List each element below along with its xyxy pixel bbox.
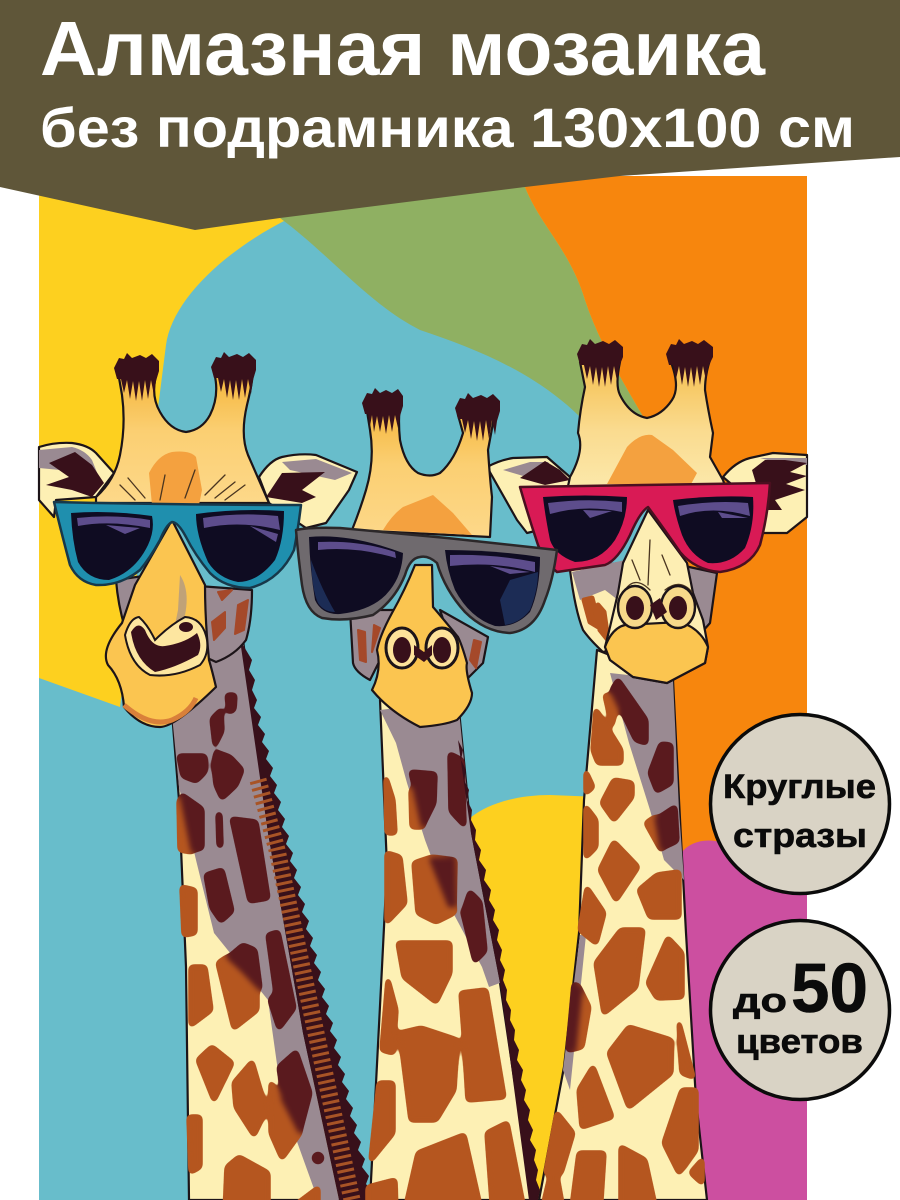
shape: green background xyxy=(280,187,645,422)
middle face xyxy=(372,565,472,727)
left nose xyxy=(125,617,207,676)
right muzzle xyxy=(605,622,708,683)
left ear, viewer left xyxy=(39,443,114,517)
left neck xyxy=(171,640,345,1200)
left snout streak xyxy=(172,575,187,640)
right head top and ossicones xyxy=(565,360,730,500)
left head top and ossicones xyxy=(96,372,269,503)
shape: orange background xyxy=(525,176,807,900)
forehead patch xyxy=(149,452,202,505)
ossicone tip xyxy=(455,393,500,441)
left ear, viewer right xyxy=(259,454,357,528)
left neck mane xyxy=(240,640,373,1200)
middle neck mane xyxy=(458,740,540,1200)
badge: round rhinestones xyxy=(710,714,890,894)
right lens xyxy=(196,510,284,582)
right lens xyxy=(673,496,753,563)
right face wrinkles xyxy=(625,540,692,592)
badge: up to 50 colours: цветов xyxy=(736,1023,863,1061)
badge: up to 50 colours: 50 xyxy=(791,949,868,1027)
badge: up to 50 colours: до xyxy=(733,982,787,1020)
left lens xyxy=(71,512,153,580)
right neck shadow xyxy=(563,673,684,1090)
ossicone tip xyxy=(666,339,713,387)
badge: up to 50 colours xyxy=(710,920,890,1100)
shape: yellow centre background xyxy=(470,795,600,1200)
shape: pink background xyxy=(682,840,807,1200)
panel: artwork background xyxy=(39,176,807,1200)
right head cheeks xyxy=(570,560,717,652)
middle neck shadow xyxy=(380,700,500,987)
badge: round rhinestones: стразы xyxy=(733,817,867,855)
left muzzle xyxy=(106,520,216,727)
forehead hair strokes xyxy=(120,470,245,500)
giraffe: middle xyxy=(296,388,557,1200)
left neck shadow xyxy=(172,640,339,1200)
subtitle: без подрамника 130х100 см xyxy=(40,96,855,159)
right nostrils xyxy=(618,586,695,628)
blue sunglasses xyxy=(54,502,301,588)
ossicone tip xyxy=(211,352,256,400)
ossicone tip xyxy=(114,353,159,401)
right ear, viewer right xyxy=(723,453,807,533)
ossicone tip xyxy=(362,388,403,434)
title: Алмазная мозаика xyxy=(40,6,766,92)
middle neck spots xyxy=(368,754,525,1200)
shape: blue background xyxy=(39,218,660,1200)
right face xyxy=(605,510,708,683)
right ear, viewer left xyxy=(487,457,580,533)
forehead patch xyxy=(383,495,472,535)
right neck xyxy=(539,650,707,1200)
middle nostrils xyxy=(386,628,458,668)
badge: round rhinestones: Круглые xyxy=(723,768,876,806)
right cheek xyxy=(185,585,252,662)
left neck spots xyxy=(179,695,322,1200)
grey sunglasses xyxy=(296,528,557,633)
giraffe: left xyxy=(39,352,373,1200)
middle neck xyxy=(370,700,532,1200)
left cheek xyxy=(116,575,150,628)
right lens xyxy=(445,550,540,626)
giraffe: right xyxy=(487,339,807,1200)
middle head top and ossicones xyxy=(352,405,495,537)
red sunglasses xyxy=(520,483,770,572)
ossicone tip xyxy=(577,339,623,387)
left mouth shading xyxy=(124,698,196,722)
left lens xyxy=(543,496,627,562)
forehead patch xyxy=(607,435,697,486)
header banner xyxy=(0,0,900,230)
middle cheeks xyxy=(350,610,488,680)
right neck spots xyxy=(541,680,702,1200)
left lens xyxy=(309,536,403,614)
